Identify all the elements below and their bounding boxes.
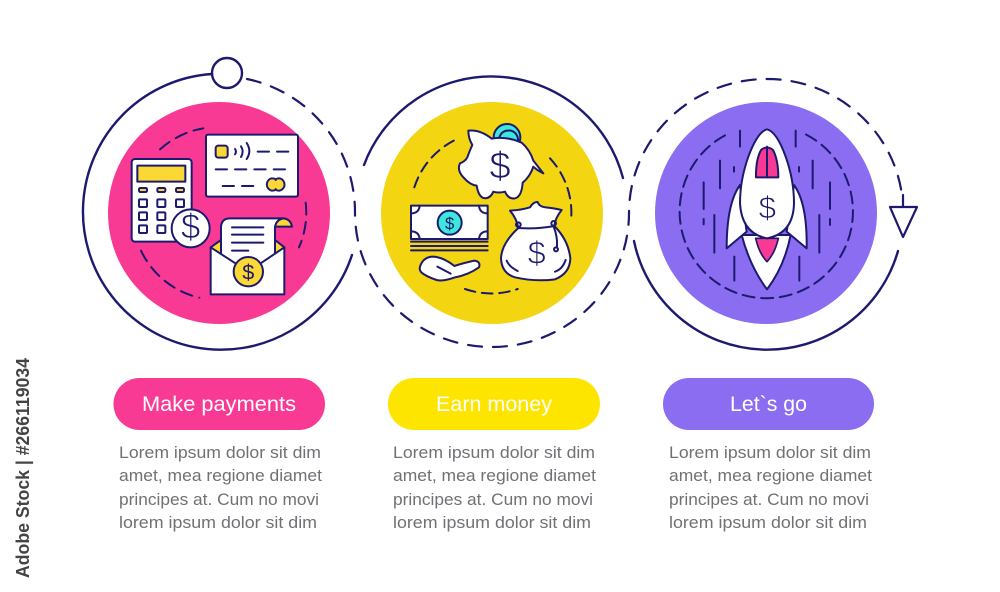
- process path rings and arrow: [83, 58, 917, 350]
- inner dashed ring: [132, 128, 306, 298]
- ring 3 solid arc: [634, 241, 898, 350]
- text block 1: [119, 443, 322, 532]
- stock id vertical text: Adobe Stock | #266119034: [13, 358, 33, 578]
- text block 1: amet, mea regione diamet: [119, 466, 322, 485]
- connecting dashed path: [247, 79, 902, 347]
- inner dashed ring: [680, 134, 853, 298]
- purple disc: [655, 102, 877, 324]
- speed lines: [704, 131, 830, 281]
- text block 1: Lorem ipsum dolor sit dim: [119, 443, 321, 462]
- pill: let's go: [663, 378, 874, 430]
- text block 1: principes at. Cum no movi: [119, 490, 319, 509]
- pill: let's go: Let`s go: [730, 393, 807, 416]
- icon: piggy bank with coin: $: [489, 145, 511, 188]
- text block 2: [393, 443, 596, 532]
- text block 3: lorem ipsum dolor sit dim: [669, 513, 867, 532]
- icon: rocket: $: [759, 190, 777, 226]
- step 2 label and description: [388, 378, 600, 532]
- icon: money bag: $: [528, 234, 546, 271]
- start node: [212, 58, 242, 88]
- text block 3: principes at. Cum no movi: [669, 490, 869, 509]
- panel: let's go circle: [655, 102, 877, 324]
- arrow head: [890, 195, 917, 237]
- pill: earn money: Earn money: [436, 393, 553, 416]
- pink disc: [108, 102, 330, 324]
- pill: earn money: [388, 378, 600, 430]
- icon: envelope with receipt: [211, 218, 292, 294]
- step 3 label and description: [663, 378, 874, 532]
- icon: calculator: $: [181, 207, 200, 246]
- text block 2: Lorem ipsum dolor sit dim: [393, 443, 595, 462]
- text block 1: lorem ipsum dolor sit dim: [119, 513, 317, 532]
- text block 3: amet, mea regione diamet: [669, 466, 872, 485]
- pill: make payments: [114, 378, 325, 430]
- icon: credit card: [206, 135, 298, 197]
- pill: make payments: Make payments: [142, 393, 296, 416]
- text block 3: [669, 443, 872, 532]
- inner dashed ring: [414, 140, 571, 293]
- panel: make payments circle: [108, 102, 330, 324]
- icon: open hand: [420, 257, 479, 280]
- ring 2 solid arc: [364, 76, 623, 178]
- text block 2: lorem ipsum dolor sit dim: [393, 513, 591, 532]
- ring 1 solid arc: [83, 74, 352, 350]
- yellow disc: [381, 102, 603, 324]
- icon: envelope with receipt: $: [242, 260, 254, 285]
- text block 2: amet, mea regione diamet: [393, 466, 596, 485]
- icon: piggy bank with coin: [459, 124, 543, 198]
- icon: banknotes: [411, 206, 488, 250]
- step 1 label and description: [114, 378, 325, 532]
- text block 3: Lorem ipsum dolor sit dim: [669, 443, 871, 462]
- panel: earn money circle: [381, 102, 603, 324]
- icon: calculator: [132, 159, 210, 247]
- icon: money bag: [501, 202, 570, 280]
- text block 2: principes at. Cum no movi: [393, 490, 593, 509]
- icon: rocket: [727, 129, 807, 289]
- icon: banknotes: $: [445, 214, 454, 233]
